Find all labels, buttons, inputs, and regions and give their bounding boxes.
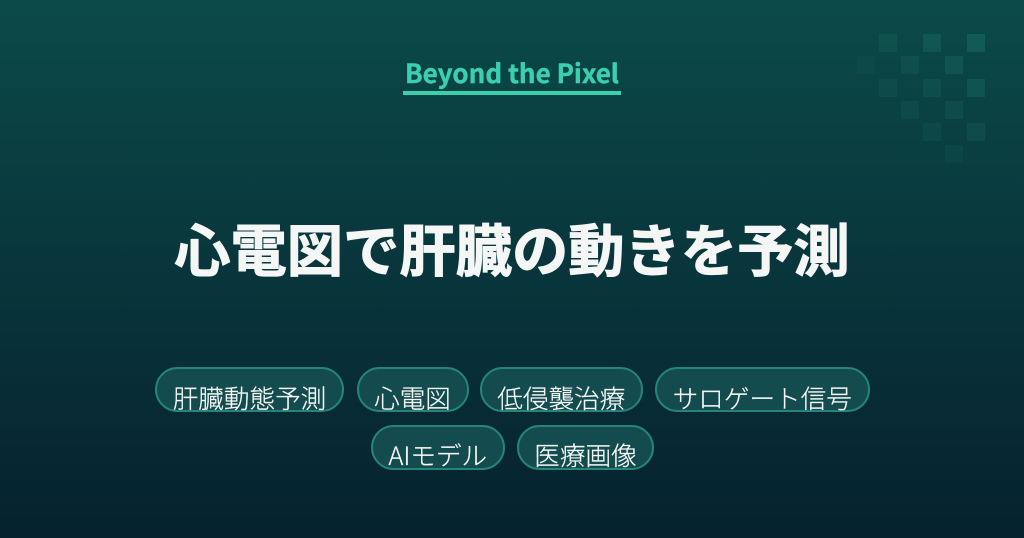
tag: minimally invasive: 低侵襲治療	[497, 378, 625, 416]
tag: liver motion prediction: 肝臓動態予測	[173, 378, 326, 416]
tag: medical imaging: 医療画像	[534, 436, 637, 473]
tag: surrogate signal	[655, 367, 870, 412]
tag: ECG	[356, 367, 468, 412]
tag: AI model: AIモデル	[388, 436, 487, 473]
brand heading: Beyond the Pixel	[405, 54, 619, 91]
tag: surrogate signal: サロゲート信号	[673, 378, 852, 416]
decorative square pattern	[879, 34, 985, 141]
tag: liver motion prediction	[155, 367, 344, 412]
tag: medical imaging	[517, 424, 654, 470]
tag: ECG: 心電図	[374, 378, 451, 416]
tag: minimally invasive	[480, 367, 643, 412]
tag: AI model	[370, 424, 505, 470]
tag group	[155, 367, 870, 473]
title: 心電図で肝臓の動きを予測	[174, 207, 850, 288]
